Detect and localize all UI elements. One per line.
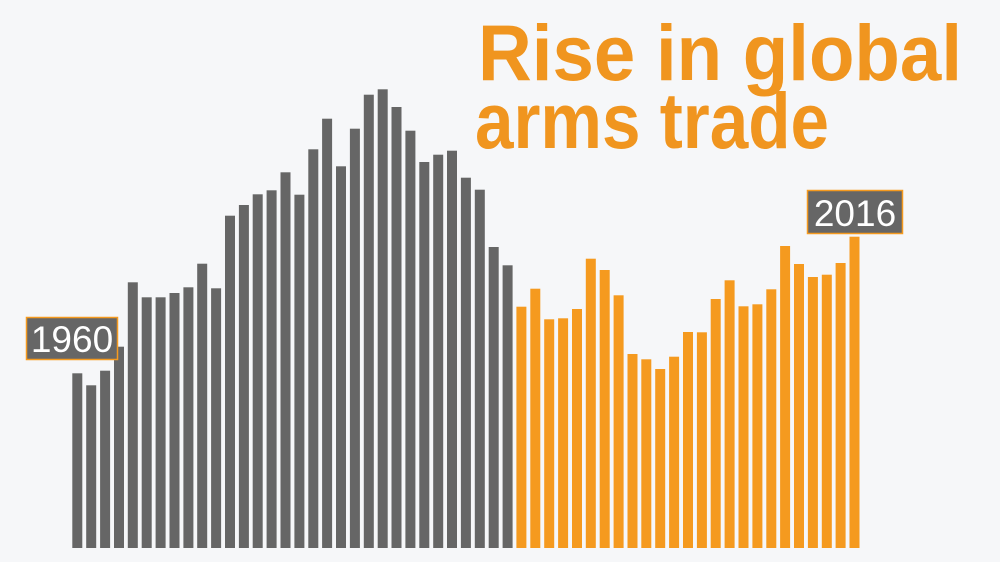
label: 1960: 1960 bbox=[31, 319, 113, 360]
title bbox=[475, 8, 962, 165]
bar chart bbox=[72, 89, 860, 548]
label: 2016: 2016 bbox=[814, 193, 896, 234]
orange bars 1992-2016 bbox=[516, 237, 860, 548]
title: arms trade bbox=[475, 76, 829, 165]
gray bars 1960-1991 bbox=[72, 89, 513, 548]
title: Rise in global bbox=[478, 8, 962, 97]
